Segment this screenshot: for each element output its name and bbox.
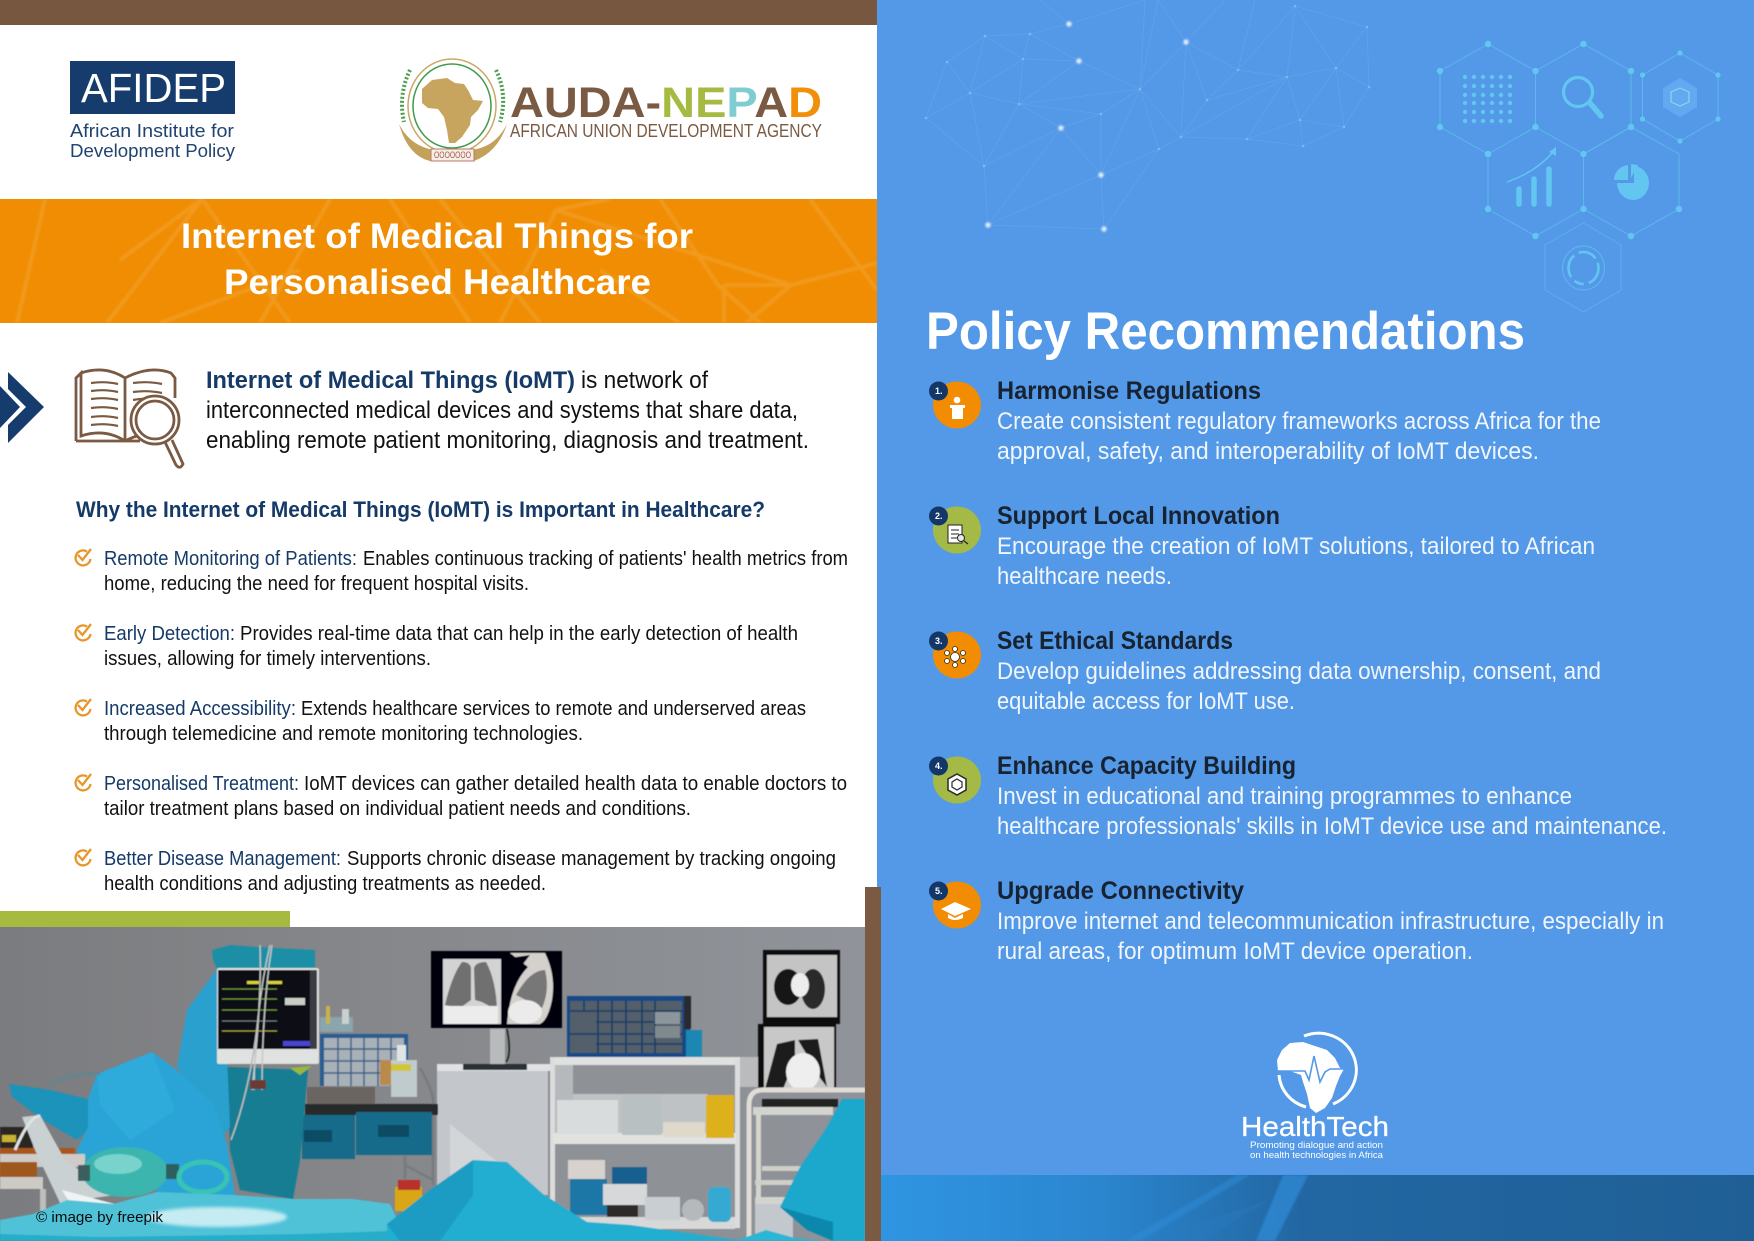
bullet: early detection: Provides real-time data that can help in the early detection of health	[240, 623, 798, 645]
bullet: personalised treatment: IoMT devices can gather detailed health data to enable doctors to	[304, 773, 847, 795]
logo: HealthTech: Promoting dialogue and action	[1250, 1140, 1383, 1151]
recommendation 3: equitable access for IoMT use.	[997, 688, 1295, 715]
panel: left white background	[0, 0, 877, 1241]
logo: HealthTech: on health technologies in Africa	[1250, 1150, 1384, 1161]
side cart	[749, 1090, 865, 1241]
blue drapes	[9, 945, 315, 1199]
bullet: remote monitoring: Enables continuous tracking of patients' health metrics from	[363, 548, 848, 570]
bullet: disease management	[76, 848, 836, 895]
logo: AFIDEP	[70, 61, 235, 161]
icon: dot grid	[1463, 75, 1512, 123]
recommendation 5: Improve internet and telecommunication infrastructure, especially in	[997, 908, 1664, 935]
recommendation 2: Encourage the creation of IoMT solutions, tailored to African	[997, 533, 1595, 560]
recommendation 4	[929, 752, 1667, 840]
background: network decoration	[926, 0, 1369, 229]
arrow: double chevron	[0, 372, 44, 443]
white shelf	[550, 1057, 758, 1229]
bullet: personalised treatment	[76, 773, 847, 820]
image credit: © image by freepik	[36, 1209, 163, 1226]
second organiser	[307, 1006, 417, 1104]
equipment on the left	[0, 1074, 115, 1211]
background: network nodes	[925, 5, 1370, 232]
recommendation 2: Support Local Innovation	[997, 502, 1280, 530]
intro text block: enabling remote patient monitoring, diagnosis and treatment.	[206, 427, 809, 454]
recommendation 5	[929, 877, 1664, 965]
bullet: disease management: health conditions and adjusting treatments as needed.	[104, 873, 546, 895]
icon: hexagon	[1663, 78, 1697, 117]
CT scans	[758, 950, 840, 1092]
icon: hexagon capacity: 4.	[935, 761, 943, 771]
recommendation 4: healthcare professionals' skills in IoMT device use and maintenance.	[997, 813, 1667, 840]
logo: AFIDEP: African Institute for	[70, 121, 234, 141]
icon: pie chart	[1614, 164, 1649, 200]
bullet: personalised treatment: tailor treatment plans based on individual patient needs and conditions.	[104, 798, 691, 820]
recommendation 3: Set Ethical Standards	[997, 627, 1233, 655]
icon: hexagon capacity	[929, 756, 981, 804]
icon: document search	[929, 506, 981, 554]
recommendation 2: healthcare needs.	[997, 563, 1172, 590]
bullet: remote monitoring: home, reducing the need for frequent hospital visits.	[104, 573, 529, 595]
resuscitator bag	[78, 1147, 227, 1197]
bullet: accessibility: Extends healthcare services to remote and underserved areas	[301, 698, 806, 720]
bullet: remote monitoring: Remote Monitoring of Patients:	[104, 548, 357, 570]
icon: podium	[929, 382, 981, 428]
intro text block	[206, 367, 809, 454]
title text: Internet of Medical Things for	[181, 217, 693, 256]
logo: AFIDEP: AFIDEP	[81, 65, 226, 111]
intro text block: is network of	[581, 367, 708, 394]
icon: podium: 1.	[935, 386, 943, 396]
icon: Africa with heartbeat	[1277, 1033, 1356, 1113]
title text	[181, 217, 693, 302]
icon: ring	[1562, 246, 1604, 290]
title banner	[0, 199, 877, 323]
list: importance of IoMT	[76, 548, 848, 895]
icon group: hexagon data icons	[1437, 41, 1721, 312]
logo: AFIDEP: Development Policy	[70, 141, 235, 161]
recommendation 5: rural areas, for optimum IoMT device operation.	[997, 938, 1473, 965]
bullet: accessibility: through telemedicine and remote monitoring technologies.	[104, 723, 583, 745]
title text: Personalised Healthcare	[224, 263, 651, 302]
brown vertical strip	[865, 887, 881, 1241]
bullet: accessibility	[76, 698, 806, 745]
heading: why IoMT matters: Why the Internet of Medical Things (IoMT) is Important in Healthcare?	[76, 497, 765, 522]
photo: hospital equipment room	[0, 927, 865, 1241]
blue sheet foreground	[0, 1099, 865, 1241]
x-ray monitor	[431, 951, 562, 1070]
recommendation 1	[929, 377, 1601, 465]
bullet: accessibility: Increased Accessibility:	[104, 698, 296, 720]
bullet: disease management: Supports chronic disease management by tracking ongoing	[347, 848, 836, 870]
logo: AUDA-NEPAD: AFRICAN UNION DEVELOPMENT AGENCY	[510, 121, 822, 141]
vitals monitor	[217, 945, 319, 1140]
wordmark: AUDA- NEPAD	[510, 79, 822, 127]
recommendation 4: Invest in educational and training programmes to enhance	[997, 783, 1572, 810]
icon: network	[929, 632, 981, 678]
icon: magnifier	[1564, 78, 1601, 116]
bullet: remote monitoring	[76, 548, 848, 595]
icon: network: 3.	[935, 636, 943, 646]
bottom blue band	[881, 1175, 1754, 1241]
heading: policy recommendations: Policy Recommendations	[926, 302, 1525, 361]
recommendation 1: Harmonise Regulations	[997, 377, 1261, 405]
logo: HealthTech	[1241, 1033, 1389, 1161]
recommendation 3: Develop guidelines addressing data ownership, consent, and	[997, 658, 1601, 685]
bullet: early detection	[76, 623, 798, 670]
top brown bar	[0, 0, 877, 25]
icon: graduation cap: 5.	[935, 886, 943, 896]
logo: AUDA-NEPAD	[399, 59, 822, 161]
icon: document search: 2.	[935, 511, 943, 521]
icon: open book with magnifier	[76, 370, 183, 467]
bullet: early detection: issues, allowing for timely interventions.	[104, 648, 431, 670]
recommendation 1: approval, safety, and interoperability of IoMT devices.	[997, 438, 1539, 465]
recommendation 3	[929, 627, 1601, 715]
intro text block: interconnected medical devices and systems that share data,	[206, 397, 798, 424]
recommendation 2	[929, 502, 1595, 590]
recommendation 1: Create consistent regulatory frameworks across Africa for the	[997, 408, 1601, 435]
cabinet	[437, 1064, 550, 1195]
bullet: early detection: Early Detection:	[104, 623, 235, 645]
trolley with drawers	[302, 1068, 438, 1211]
logo: HealthTech: HealthTech	[1241, 1111, 1389, 1142]
intro text block: Internet of Medical Things (IoMT)	[206, 367, 575, 394]
icon: rising bar chart	[1507, 147, 1556, 204]
icon: African Union emblem	[399, 59, 507, 161]
green accent bar	[0, 911, 290, 927]
recommendation 4: Enhance Capacity Building	[997, 752, 1296, 780]
icon: graduation cap	[929, 882, 981, 928]
recommendation 5: Upgrade Connectivity	[997, 877, 1244, 905]
bullet: disease management: Better Disease Management:	[104, 848, 341, 870]
panel: right blue background	[877, 0, 1754, 1241]
icon: African Union emblem: OOOOOOO	[434, 150, 471, 160]
bullet: personalised treatment: Personalised Treatment:	[104, 773, 299, 795]
small parts organiser	[567, 996, 702, 1057]
